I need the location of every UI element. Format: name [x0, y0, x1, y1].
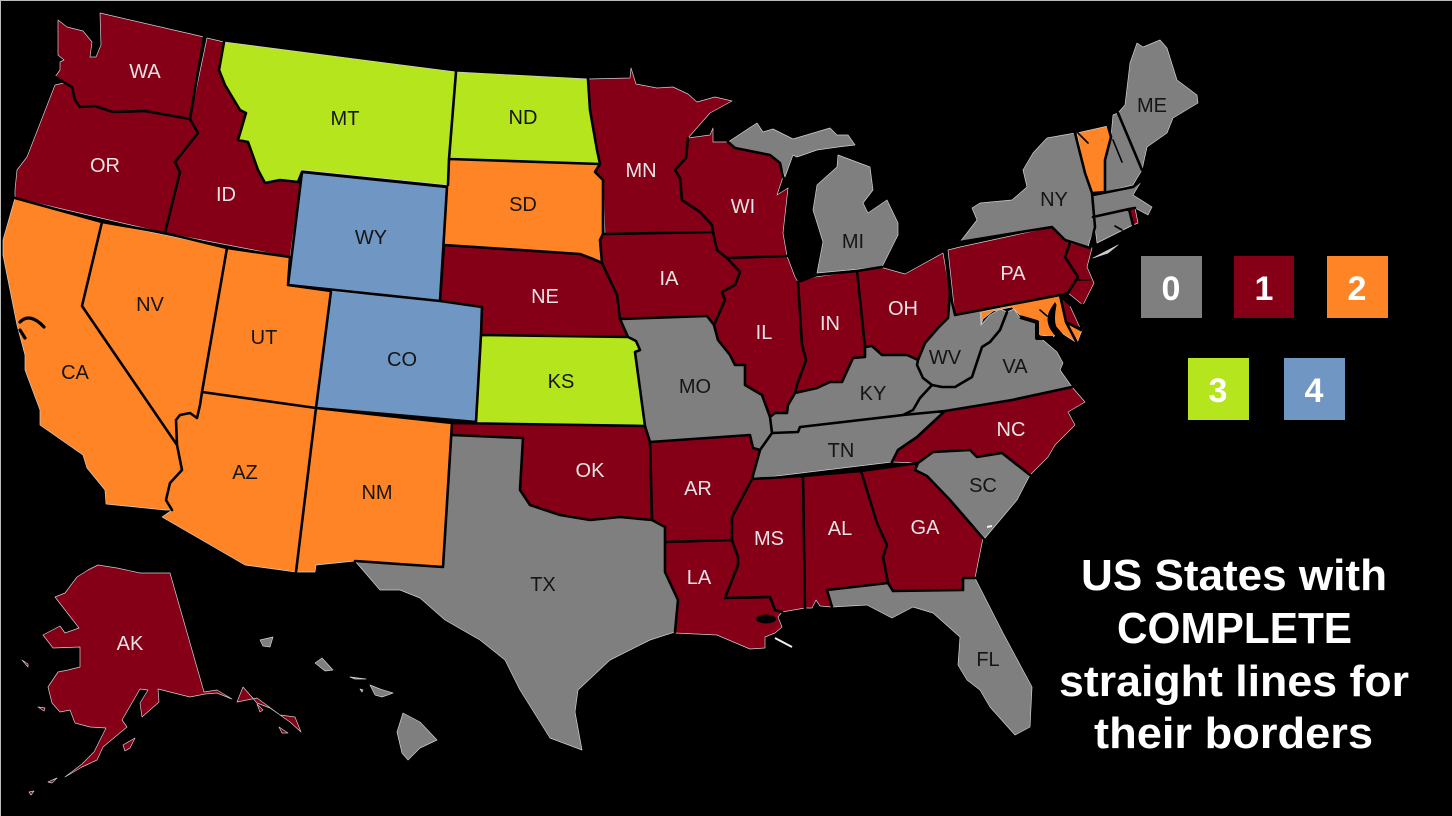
state: GA — [861, 463, 983, 591]
state: HI — [260, 637, 437, 760]
state: PA: PA — [1000, 263, 1026, 285]
state: NY: NY — [1040, 189, 1068, 211]
state: NM — [296, 408, 452, 572]
state: OR: OR — [90, 155, 120, 177]
state: FL — [827, 578, 1032, 735]
state: NH — [1105, 113, 1142, 192]
title: straight lines for — [1059, 657, 1409, 706]
state: ND — [449, 72, 600, 164]
state: RI — [1129, 208, 1138, 225]
state: CO: CO — [387, 349, 417, 371]
legend: 0 borders — [1141, 256, 1202, 318]
state: OK: OK — [576, 460, 605, 482]
state: OH: OH — [888, 298, 918, 320]
legend: 3 borders — [1188, 358, 1249, 420]
title: US States with — [1081, 551, 1387, 600]
state: ID: ID — [216, 184, 236, 206]
state: IL — [714, 256, 806, 417]
state: OK — [452, 423, 652, 520]
state: NE — [440, 245, 628, 337]
title — [1059, 551, 1409, 758]
state: MI — [728, 123, 898, 273]
legend: 3 borders: 3 — [1209, 372, 1227, 410]
state: OH — [857, 253, 950, 360]
state: CA: CA — [61, 362, 90, 384]
legend: 2 borders: 2 — [1348, 270, 1366, 308]
state: WY: WY — [355, 227, 387, 249]
state: NJ — [1065, 243, 1094, 305]
state: ME: ME — [1137, 95, 1167, 117]
legend: 0 borders: 0 — [1162, 270, 1180, 308]
state: IN: IN — [820, 313, 840, 335]
state: SC — [915, 450, 1030, 538]
state: MT: MT — [331, 108, 359, 130]
state: MS: MS — [754, 528, 784, 550]
state: NC — [892, 387, 1085, 475]
state: TN: TN — [828, 440, 854, 462]
state: IL: IL — [756, 322, 772, 344]
legend: 2 borders — [1327, 256, 1388, 318]
Mississippi delta spit — [775, 638, 792, 647]
state: WV: WV — [929, 347, 962, 369]
state: SC: SC — [969, 475, 997, 497]
legend: 4 borders — [1284, 358, 1345, 420]
state: KY — [770, 346, 932, 433]
state: CT — [1093, 209, 1133, 243]
state: WI: WI — [731, 196, 755, 218]
state: CA — [3, 198, 182, 510]
state: KS — [476, 335, 645, 426]
state: KS: KS — [548, 371, 574, 393]
legend — [1141, 256, 1388, 420]
state: MN: MN — [625, 160, 657, 182]
state: WV — [917, 293, 1007, 387]
state: AZ: AZ — [232, 462, 258, 484]
state: PA — [948, 227, 1078, 315]
state: ID — [165, 38, 302, 257]
state: MI: MI — [842, 231, 864, 253]
state: SD: SD — [509, 194, 537, 216]
state: AL — [803, 471, 888, 608]
state: LA — [665, 540, 782, 649]
state: KY: KY — [860, 383, 886, 405]
state: WA — [55, 13, 204, 119]
state: NC: NC — [997, 419, 1025, 441]
state: DE — [1060, 295, 1081, 330]
state: NY — [960, 133, 1118, 258]
state: UT — [202, 248, 331, 408]
Potomac river — [1020, 317, 1053, 338]
legend: 1 border: 1 — [1255, 270, 1273, 308]
state: AK: AK — [117, 633, 144, 655]
state: ME — [1118, 40, 1198, 170]
state: VT — [1077, 126, 1111, 193]
state: TX: TX — [530, 574, 556, 596]
legend: 1 border — [1234, 256, 1294, 318]
state: OR — [15, 83, 198, 233]
title: COMPLETE — [1117, 604, 1352, 653]
state: IN — [795, 271, 865, 393]
state: AK — [22, 565, 301, 795]
state: MT — [219, 42, 456, 185]
San Francisco bay — [20, 318, 44, 338]
state: AR: AR — [684, 478, 712, 500]
Lake Pontchartrain — [756, 614, 776, 624]
state: IA: IA — [660, 268, 679, 290]
map of US states — [3, 13, 1198, 795]
state: FL: FL — [976, 649, 1000, 671]
state: TX — [355, 435, 678, 750]
state: ND: ND — [509, 107, 537, 129]
Chesapeake bay — [1048, 303, 1067, 347]
state: AZ — [162, 392, 316, 572]
state: IA — [600, 232, 740, 325]
state: MO: MO — [679, 376, 711, 398]
state: TN — [752, 411, 945, 479]
state: MN — [588, 68, 732, 234]
state: UT: UT — [251, 327, 277, 349]
state: AL: AL — [828, 518, 852, 540]
legend: 4 borders: 4 — [1305, 372, 1324, 410]
state: WY — [288, 172, 447, 301]
state: WA: WA — [129, 61, 161, 83]
state: NE: NE — [531, 286, 559, 308]
state: NM: NM — [361, 482, 393, 504]
state: VA — [903, 309, 1072, 415]
state: GA: GA — [911, 517, 940, 539]
state: MD — [981, 295, 1082, 343]
state: MS — [725, 476, 805, 612]
state: MO — [620, 316, 772, 450]
state: NV — [82, 222, 227, 445]
state: MA — [1093, 180, 1152, 217]
state: CO — [316, 291, 482, 422]
state: WI — [675, 128, 788, 258]
title: their borders — [1094, 709, 1373, 758]
state: AR — [650, 435, 760, 542]
state: NV: NV — [136, 294, 165, 316]
state: SD — [444, 159, 603, 263]
state: VA: VA — [1002, 356, 1028, 378]
state: LA: LA — [687, 567, 712, 589]
barrier island — [987, 526, 992, 527]
